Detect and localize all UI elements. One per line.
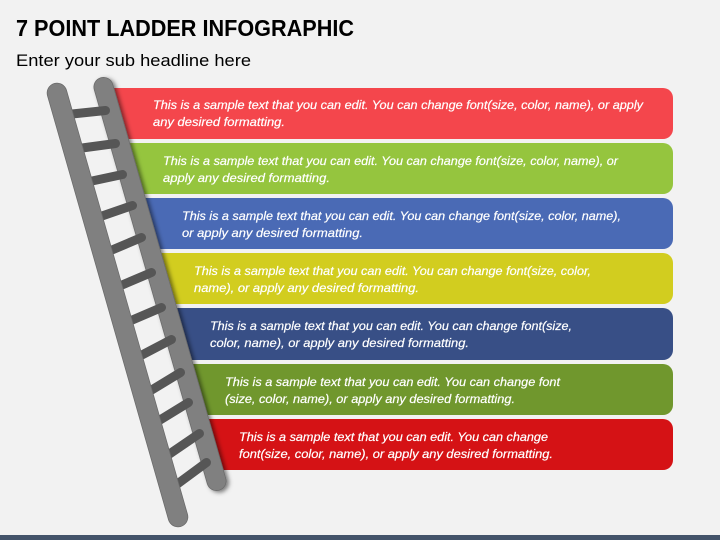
panel: bar 7 dark red: This is a sample text that you can edit. You can change (239, 430, 548, 444)
panel: bar 1 red (104, 88, 673, 139)
panel: bar 3 blue: or apply any desired formatting. (182, 226, 363, 240)
panel: bar 4 yellow: name), or apply any desired formatting. (194, 281, 419, 295)
panel: bar 4 yellow: This is a sample text that you can edit. You can change font(size, color, (194, 264, 591, 278)
left rail (57, 93, 178, 517)
panel: bar 6 olive: (size, color, name), or apply any desired formatting. (225, 392, 515, 406)
panel: bar 5 navy (167, 308, 673, 360)
panel: bar 1 red: This is a sample text that you can edit. You can change font(size, color, name), or apply (153, 98, 644, 112)
panel: bar 2 green: apply any desired formatting. (163, 171, 330, 185)
panel: bar 2 green (120, 143, 673, 194)
panel: bar 1 red: any desired formatting. (153, 115, 285, 129)
right rail (104, 87, 216, 481)
title: 7 POINT LADDER INFOGRAPHIC (16, 15, 354, 41)
rungs (72, 110, 206, 485)
footer bar (0, 535, 720, 540)
panel: bar 2 green: This is a sample text that you can edit. You can change font(size, color, name), or (163, 154, 619, 168)
panel: bar 5 navy: This is a sample text that you can edit. You can change font(size, (210, 319, 572, 333)
panel: bar 5 navy: color, name), or apply any desired formatting. (210, 336, 469, 350)
ladder (57, 87, 216, 517)
panel: bar 7 dark red (199, 419, 673, 470)
panel: bar 7 dark red: font(size, color, name), or apply any desired formatting. (239, 447, 553, 461)
panel: bar 3 blue: This is a sample text that you can edit. You can change font(size, color, name), (182, 209, 621, 223)
panel: bar 6 olive: This is a sample text that you can edit. You can change font (225, 375, 561, 389)
panel: bar 6 olive (183, 364, 673, 415)
subtitle: Enter your sub headline here (16, 51, 251, 70)
panel: bar 3 blue (135, 198, 673, 249)
panel: bar 4 yellow (151, 253, 673, 304)
